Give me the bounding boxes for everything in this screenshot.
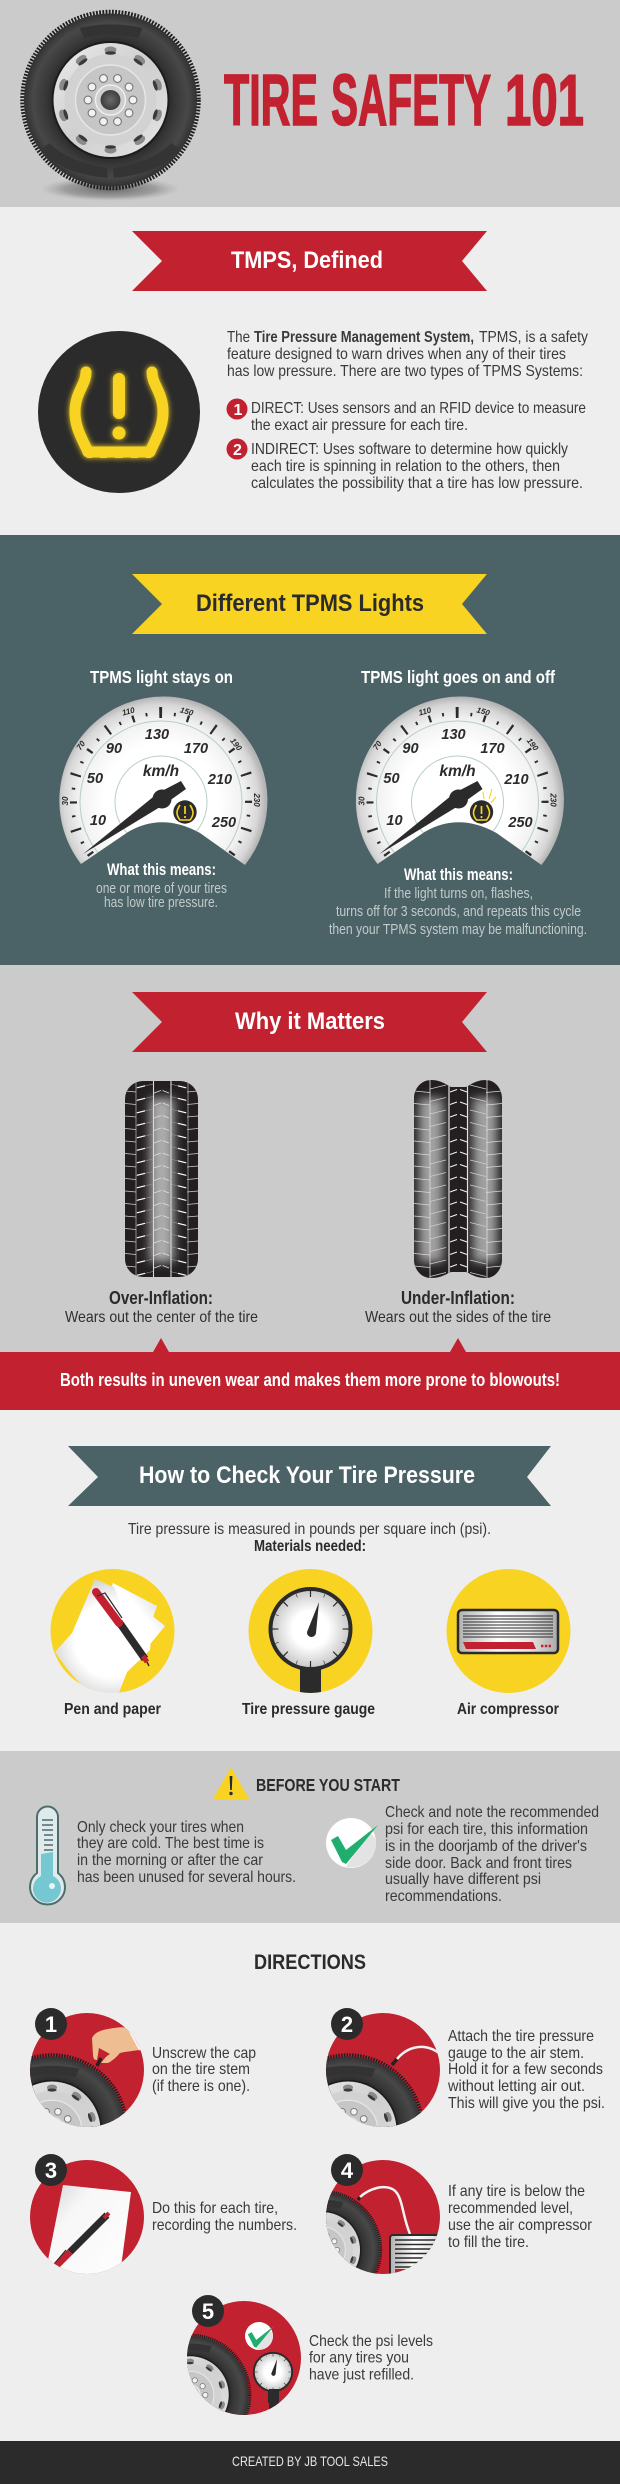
explanation bbox=[96, 861, 227, 911]
column: light stays on bbox=[59, 667, 267, 911]
explanation bbox=[329, 866, 587, 938]
intro paragraph bbox=[227, 329, 588, 380]
gauge: km/h bbox=[439, 763, 476, 780]
panel: how to check bbox=[50, 1446, 570, 1718]
tire shadow bbox=[40, 177, 180, 201]
text: recommended psi: side door. Back and front tires bbox=[385, 1855, 572, 1872]
title bbox=[224, 61, 584, 141]
gauge: 30 bbox=[61, 796, 70, 805]
title: SAFETY bbox=[331, 61, 491, 141]
text: recommended psi bbox=[385, 1804, 599, 1905]
step 5: 5 bbox=[202, 2299, 214, 2324]
intro text: Tire pressure is measured in pounds per square inch (psi). bbox=[128, 1521, 491, 1538]
title: TIRE bbox=[224, 61, 318, 141]
text: recommended psi: recommendations. bbox=[385, 1888, 502, 1905]
footer bbox=[0, 2441, 620, 2484]
heading: before you start: BEFORE YOU START bbox=[256, 1775, 400, 1795]
step 3: Do this for each tire, bbox=[152, 2200, 278, 2217]
intro paragraph: feature designed to warn drives when any of their tires bbox=[227, 346, 566, 363]
ribbon heading: TMPS, Defined: TMPS, Defined bbox=[231, 247, 383, 274]
text: recommended psi: usually have different psi bbox=[385, 1871, 541, 1888]
step 2 bbox=[326, 2008, 604, 2127]
text: check when cold: they are cold. The best time is bbox=[77, 1835, 264, 1852]
material: tire pressure gauge: Tire pressure gauge bbox=[242, 1701, 375, 1718]
material: air compressor: Air compressor bbox=[457, 1701, 559, 1718]
material: pen and paper: Pen and paper bbox=[64, 1701, 161, 1718]
intro text bbox=[128, 1521, 491, 1555]
icon: warning triangle bbox=[213, 1767, 249, 1799]
material: pen and paper bbox=[50, 1569, 174, 1718]
list item: direct bbox=[226, 398, 586, 434]
ribbon heading: Different TPMS Lights bbox=[132, 574, 487, 634]
gauge: 250 bbox=[507, 815, 533, 831]
panel: header bbox=[0, 0, 620, 207]
intro paragraph: The bbox=[227, 329, 250, 346]
icon: green check bbox=[326, 1818, 378, 1868]
gauge: 230 bbox=[548, 792, 558, 807]
step 1: Unscrew the cap bbox=[152, 2045, 256, 2062]
gauge: 210 bbox=[207, 772, 232, 788]
step 2: Hold it for a few seconds bbox=[448, 2061, 603, 2078]
step 1: on the tire stem bbox=[152, 2061, 250, 2078]
icon: tire bbox=[22, 12, 198, 188]
text: check when cold bbox=[77, 1819, 296, 1886]
ribbon heading: Why it Matters bbox=[132, 992, 487, 1052]
step 2: gauge to the air stem. bbox=[448, 2045, 584, 2062]
step 4: use the air compressor bbox=[448, 2217, 593, 2234]
step 5: for any tires you bbox=[309, 2350, 409, 2366]
list item: indirect: each tire is spinning in relation to the others, then bbox=[251, 458, 560, 475]
step 1: 1 bbox=[45, 2012, 57, 2037]
gauge: 150 bbox=[179, 706, 195, 718]
step 4: 4 bbox=[341, 2158, 354, 2183]
gauge: 250 bbox=[211, 815, 236, 831]
gauge: 110 bbox=[418, 705, 433, 718]
gauge: 110 bbox=[121, 705, 136, 718]
gauge: 30 bbox=[358, 796, 366, 805]
material: tire pressure gauge bbox=[242, 1569, 375, 1718]
list item: direct: the exact air pressure for each tire. bbox=[251, 417, 468, 434]
intro paragraph: TPMS, is a safety bbox=[479, 329, 588, 346]
intro text: Materials needed: bbox=[254, 1538, 366, 1555]
gauge: 90 bbox=[402, 741, 419, 757]
caption: under-inflation: Under-Inflation: bbox=[401, 1288, 515, 1308]
tire tread: under-inflation bbox=[414, 1080, 502, 1278]
caption: over-inflation: Wears out the center of the tire bbox=[65, 1309, 258, 1326]
gauge: 230 bbox=[252, 792, 261, 807]
panel: before you start bbox=[0, 1751, 620, 1923]
gauge: 150 bbox=[476, 706, 491, 718]
gauge: 50 bbox=[383, 771, 400, 787]
panel: TPMS defined bbox=[0, 207, 620, 535]
callout banner bbox=[0, 1338, 620, 1410]
gauge: 170 bbox=[184, 741, 208, 757]
ribbon heading: How to Check bbox=[68, 1446, 551, 1506]
column: light goes on and off bbox=[329, 667, 587, 938]
ribbon heading: Different TPMS Lights: Different TPMS Lights bbox=[196, 590, 424, 617]
tire tread: over-inflation bbox=[125, 1081, 198, 1277]
subheading: TPMS light stays on bbox=[90, 667, 233, 687]
gauge: 190 bbox=[228, 736, 244, 753]
list item: indirect bbox=[226, 438, 583, 492]
explanation: has low tire pressure. bbox=[104, 894, 218, 911]
material: air compressor bbox=[446, 1569, 570, 1718]
explanation: What this means: bbox=[107, 861, 216, 879]
icon: TPMS warning light bbox=[38, 331, 200, 493]
step 4: recommended level, bbox=[448, 2200, 573, 2217]
step 3: recording the numbers. bbox=[152, 2217, 297, 2234]
gauge: 130 bbox=[441, 727, 466, 743]
step 3: 3 bbox=[45, 2158, 57, 2183]
gauge: 10 bbox=[90, 813, 106, 829]
list item: direct: 1 bbox=[234, 402, 242, 419]
panel: different TPMS lights bbox=[0, 535, 620, 965]
step 3 bbox=[30, 2154, 296, 2274]
step 5 bbox=[187, 2295, 432, 2415]
step 1 bbox=[30, 2008, 256, 2127]
step 2: without letting air out. bbox=[447, 2078, 585, 2095]
panel: directions bbox=[30, 1954, 604, 2415]
text: check when cold: has been unused for several hours. bbox=[77, 1869, 296, 1886]
step 5: Check the psi levels bbox=[309, 2333, 433, 2350]
step 2: 2 bbox=[341, 2012, 353, 2037]
gauge bbox=[356, 697, 564, 892]
explanation: If the light turns on, flashes, bbox=[384, 885, 533, 902]
gauge: 10 bbox=[386, 813, 403, 829]
footer: CREATED BY JB TOOL SALES bbox=[232, 2453, 388, 2469]
text: recommended psi: is in the doorjamb of the driver's bbox=[385, 1838, 587, 1855]
step 4: If any tire is below the bbox=[448, 2183, 585, 2200]
icon: thermometer bbox=[30, 1807, 65, 1904]
caption: under-inflation: Wears out the sides of the tire bbox=[365, 1309, 551, 1326]
step 1: (if there is one). bbox=[152, 2078, 250, 2095]
gauge: 50 bbox=[87, 771, 103, 787]
gauge: 190 bbox=[525, 736, 540, 753]
gauge: km/h bbox=[143, 763, 179, 780]
caption: over-inflation bbox=[65, 1288, 258, 1326]
list item: indirect: 2 bbox=[233, 442, 242, 459]
explanation: one or more of your tires bbox=[96, 880, 227, 897]
caption: over-inflation: Over-Inflation: bbox=[109, 1288, 213, 1308]
list item: indirect: INDIRECT: Uses software to determine how quickly bbox=[251, 441, 568, 458]
text: check when cold: Only check your tires when bbox=[77, 1819, 244, 1836]
heading: directions: DIRECTIONS bbox=[254, 1950, 366, 1974]
caption: under-inflation bbox=[365, 1288, 551, 1326]
ribbon heading: How to Check: How to Check Your Tire Pressure bbox=[139, 1462, 475, 1489]
gauge: 210 bbox=[503, 772, 529, 788]
intro paragraph: Tire Pressure Management System, bbox=[254, 329, 474, 346]
gauge: 90 bbox=[106, 741, 122, 757]
gauge: 170 bbox=[480, 741, 505, 757]
text: recommended psi: psi for each tire, this information bbox=[385, 1821, 588, 1838]
step 4: to fill the tire. bbox=[448, 2234, 529, 2251]
ribbon heading: Why it Matters: Why it Matters bbox=[235, 1008, 385, 1035]
gauge: 70 bbox=[75, 739, 88, 752]
step 2: Attach the tire pressure bbox=[448, 2028, 594, 2045]
step 4 bbox=[326, 2154, 592, 2274]
panel: why it matters bbox=[0, 965, 620, 1410]
step 5: have just refilled. bbox=[309, 2366, 414, 2384]
subheading: TPMS light goes on and off bbox=[361, 667, 555, 687]
ribbon heading: TMPS, Defined bbox=[132, 231, 487, 291]
gauge: 70 bbox=[371, 739, 384, 752]
gauge bbox=[59, 697, 267, 892]
list item: indirect: calculates the possibility that a tire has low pressure. bbox=[251, 475, 583, 492]
step 2: This will give you the psi. bbox=[448, 2095, 605, 2112]
text: check when cold: in the morning or after the car bbox=[77, 1852, 264, 1869]
gauge: 130 bbox=[145, 727, 169, 743]
explanation: What this means: bbox=[404, 866, 513, 884]
